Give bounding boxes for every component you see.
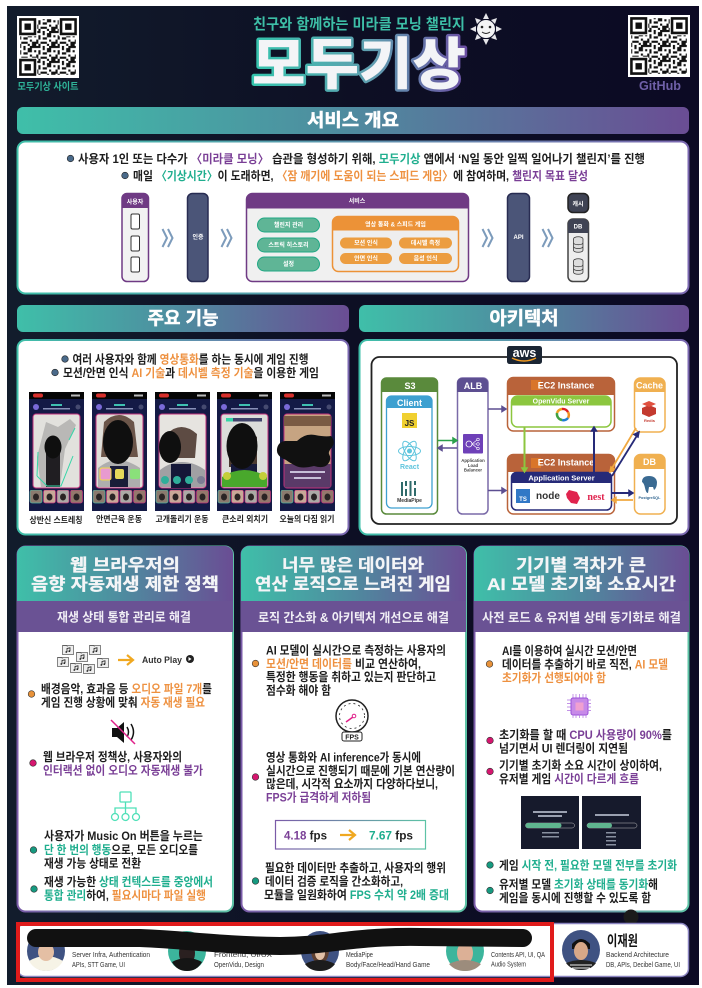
- cache box: Cache: [636, 380, 663, 390]
- member 4: [446, 931, 545, 971]
- icon: FPS gauge: FPS: [345, 734, 359, 742]
- text: browser policy: [30, 749, 203, 778]
- text: single action: 재생 가능 상태로 전환: [44, 856, 141, 870]
- icon: React: React: [400, 464, 420, 471]
- phone: head tilting exercise: [155, 392, 210, 511]
- text: model init: 초기화가 선행되어야 함: [502, 670, 606, 685]
- QR code: GitHub: [628, 15, 690, 93]
- AWS badge: aws: [513, 346, 536, 360]
- diagram: auth: 인증: [192, 233, 204, 241]
- card title: 웹 브라우저의: [70, 556, 180, 575]
- callout: fps improvement: 7.67 fps: [369, 828, 413, 842]
- QR label: site: 모두기상 사이트: [18, 80, 78, 93]
- cache box: [634, 378, 666, 432]
- icon: music files to auto play: Auto Play: [142, 655, 182, 665]
- box: video call and speed game: 영상 통화 & 스피드 게임: [365, 220, 426, 228]
- client box: [386, 396, 432, 508]
- text: sync state: 게임을 동시에 진행할 수 있도록 함: [499, 890, 651, 905]
- card title: AI 모델 초기화 소요시간: [487, 575, 676, 594]
- redaction dot: [624, 910, 638, 924]
- member 5: DB, APIs, Decibel Game, UI: [606, 960, 680, 969]
- text: audio files: [28, 681, 212, 710]
- text: logic simplified: 데이터 검증 로직을 간소화하고,: [265, 874, 403, 888]
- heading: service overview: [17, 107, 689, 134]
- icon: load balancer: [463, 434, 483, 454]
- text: audio files: 배경음악, 효과음 등 오디오 파일 7개를: [41, 681, 212, 696]
- card: too much data: [241, 546, 466, 912]
- member 5: 이재원: [607, 933, 638, 950]
- heading: key features: [17, 305, 349, 332]
- card title: [474, 546, 689, 601]
- DB box: [634, 454, 666, 514]
- caption: upper body stretching: 상반신 스트레칭: [30, 515, 82, 525]
- ALB box: [457, 378, 488, 514]
- text: logic simplified: [252, 860, 449, 902]
- caption: head tilting exercise: 고개돌리기 운동: [156, 514, 209, 524]
- overview sentence 1: 사용자 1인 또는 다수가 〈미라클 모닝〉 습관을 형성하기 위해, 모두기상 앱에서 ‘N일 동안 일찍 일어나기 챌린지’를 진행: [78, 151, 645, 166]
- card: autoplay policy: [17, 546, 233, 912]
- diagram: DB: [568, 219, 588, 282]
- application server: Application Server: [528, 474, 595, 482]
- card subtitle: 재생 상태 통합 관리로 해결: [57, 610, 191, 624]
- redaction scribble over names: [36, 937, 523, 946]
- member 5: [562, 930, 680, 970]
- icon: FPS gauge: [336, 700, 368, 742]
- text: fps drop: FPS가 급격하게 저하됨: [266, 790, 371, 804]
- OpenVidu server: OpenVidu Server: [533, 398, 590, 406]
- client box: Client: [397, 398, 422, 408]
- AWS boundary: [372, 357, 677, 524]
- member 4: Contents API, UI, QA: [491, 950, 545, 959]
- card title: 음향 자동재생 제한 정책: [31, 575, 219, 594]
- card: device gap: [474, 546, 689, 912]
- arrows: [438, 406, 639, 502]
- callout: fps improvement: [276, 820, 426, 849]
- pills: service functions: [258, 218, 320, 271]
- ALB box: Balancer: [464, 468, 482, 472]
- ALB box: Application: [461, 458, 485, 463]
- text: motion data: [252, 644, 446, 698]
- text: motion data: AI 모델이 실시간으로 측정하는 사용자의: [266, 644, 446, 658]
- caption: facial muscle exercise: 안면근육 운동: [96, 514, 142, 524]
- application server: [511, 472, 612, 510]
- panel: service overview: [18, 142, 688, 294]
- icon: smiling sun: [470, 13, 502, 45]
- card title: 기기별 격차가 큰: [516, 556, 646, 575]
- diagram: API: [508, 194, 530, 282]
- member 3: Body/Face/Head/Hand Game: [346, 960, 430, 969]
- text: model init: 데이터를 추출하기 바로 직전, AI 모델: [502, 656, 668, 672]
- card title: [17, 546, 233, 601]
- text: sync state: 유저별 모델 초기화 상태를 동기화해: [499, 876, 658, 892]
- subtitle: 친구와 함께하는 미라클 모닝 챌린지: [253, 16, 465, 33]
- S3 box: S3: [404, 381, 416, 391]
- icon: chip: [567, 694, 592, 718]
- icon: PostgreSQL: PostgreSQL: [639, 496, 661, 500]
- phone: facial muscle exercise: [92, 392, 147, 511]
- member 4: Audio System: [491, 960, 526, 968]
- diagram: API: API: [513, 235, 524, 241]
- box: video call and speed game: 음성 인식: [414, 254, 437, 262]
- member 2: OpenVidu, Design: [214, 960, 264, 969]
- card subtitle: [474, 601, 689, 632]
- card title: [241, 546, 466, 601]
- text: timing difference: [487, 758, 662, 786]
- title block: [252, 16, 466, 96]
- card subtitle: 로직 간소화 & 아키텍처 개선으로 해결: [258, 610, 449, 625]
- text: fps drop: 영상 통화와 AI inference가 동시에: [266, 750, 421, 764]
- callout: fps improvement: 4.18 fps: [284, 828, 327, 842]
- text: sync state: [487, 876, 658, 905]
- arrow: [542, 229, 552, 247]
- icon: WebRTC: [557, 409, 569, 420]
- S3 box: [381, 378, 438, 514]
- diagram: service box: 서비스: [349, 197, 366, 205]
- text: fps drop: 많은데, 시각적 요소까지 다양하다보니,: [266, 776, 438, 791]
- text: motion data: 특정한 행동을 취하고 있는지 판단하고: [266, 669, 436, 684]
- features sentence 1: 여러 사용자와 함께 영상통화를 하는 동시에 게임 진행: [72, 352, 308, 366]
- card title: 연산 로직으로 느려진 게임: [255, 575, 451, 594]
- diagram: auth: [188, 194, 208, 282]
- box: video call and speed game: 데시벨 측정: [411, 239, 440, 247]
- heading: architecture: 아키텍처: [490, 308, 558, 328]
- card title: 너무 많은 데이터와: [282, 556, 424, 575]
- arrow: [222, 229, 232, 247]
- diagram: DB: DB: [574, 224, 583, 230]
- EC2 instance: application: EC2 Instance: [538, 458, 594, 468]
- diagram: cache: 캐시: [572, 200, 584, 208]
- text: CPU usage: 넘기면서 UI 렌더링이 지연됨: [499, 740, 628, 756]
- text: state context: [31, 874, 213, 902]
- text: browser policy: 인터랙션 없이 오디오 자동재생 불가: [43, 762, 203, 778]
- icon: Nest: nest: [587, 492, 605, 503]
- diagram: user: [122, 193, 148, 282]
- diagram: cache: [568, 194, 588, 212]
- text: single action: [30, 828, 203, 870]
- text: motion data: 모션/안면 데이터를 비교 연산하여,: [266, 657, 421, 671]
- main title: 모두기상: [252, 33, 466, 96]
- heading: architecture: [359, 305, 689, 332]
- box: video call and speed game: 모션 인식: [354, 239, 378, 247]
- features sentence 2: 모션/안면 인식 AI 기술과 데시벨 측정 기술을 이용한 게임: [63, 365, 319, 380]
- icon: muted speaker: [111, 720, 135, 744]
- text: state context: 통합 관리하여, 필요시마다 파일 실행: [44, 888, 206, 902]
- text: browser policy: 웹 브라우저 정책상, 사용자와의: [43, 749, 182, 764]
- text: init before game: 게임 시작 전, 필요한 모델 전부를 초기화: [499, 858, 677, 872]
- card subtitle: [17, 601, 233, 632]
- text: timing difference: 유저별 게임 시간이 다르게 흐름: [499, 771, 639, 786]
- text: model init: [486, 644, 668, 685]
- overview sentence 2: 매일 〈기상시간〉이 도래하면, 〈잠 깨기에 도움이 되는 스피드 게임〉에 참여하며, 챌린지 목표 달성: [133, 168, 588, 183]
- card subtitle: [241, 601, 466, 632]
- DB box: DB: [643, 457, 656, 467]
- text: logic simplified: 필요한 데이터만 추출하고, 사용자의 행위: [265, 860, 446, 875]
- icon: music files to auto play: [58, 646, 194, 674]
- phone: reading today's resolution: [280, 392, 335, 511]
- member 3: MediaPipe: [346, 950, 373, 959]
- icon: JS: JS: [405, 419, 415, 428]
- diagram: service box: [246, 194, 469, 282]
- member 1: Server Infra, Authentication: [72, 950, 150, 959]
- pills: service functions: 챌린지 관리: [274, 221, 303, 229]
- pills: service functions: 스트릭 히스토리: [268, 241, 309, 249]
- ALB box: Load: [468, 463, 479, 468]
- icon: state tree: [112, 792, 140, 820]
- EC2 instance: OpenVidu: EC2 Instance: [538, 380, 594, 390]
- member 1: [27, 931, 150, 971]
- box: video call and speed game: [332, 216, 459, 272]
- screenshot: loading screen 1: [521, 796, 579, 849]
- text: state context: 재생 가능한 상태 컨텍스트를 중앙에서: [44, 874, 213, 889]
- icon: TypeScript: TS: [519, 497, 527, 503]
- member 2: [168, 931, 272, 971]
- member 1: APIs, STT Game, UI: [72, 960, 125, 969]
- card subtitle: 사전 로드 & 유저별 상태 동기화로 해결: [482, 610, 681, 625]
- panel: architecture: [360, 340, 688, 534]
- phone: upper body stretching: [29, 392, 84, 511]
- text: CPU usage: 초기화를 할 때 CPU 사용량이 90%를: [499, 727, 672, 742]
- red highlight box: [18, 924, 552, 980]
- icon: Redis: Redis: [644, 418, 656, 423]
- heading: key features: 주요 기능: [148, 308, 218, 328]
- arrow: [162, 229, 172, 247]
- box: video call and speed game: 안면 인식: [354, 254, 378, 262]
- panel: team: [18, 924, 688, 976]
- arrow: [482, 229, 492, 247]
- redaction blob over phone 5: [277, 435, 334, 468]
- QR label: GitHub: GitHub: [639, 79, 681, 93]
- text: CPU usage: [487, 727, 672, 756]
- heading: service overview: 서비스 개요: [307, 110, 399, 130]
- EC2 instance: application: [507, 454, 615, 514]
- member 2: Frontend, UI/UX: [214, 950, 272, 959]
- text: audio files: 게임 진행 상황에 맞춰 자동 재생 필요: [41, 694, 205, 710]
- pills: service functions: 설정: [283, 260, 294, 268]
- text: fps drop: 실시간으로 진행되기 때문에 기본 연산량이: [266, 763, 455, 778]
- QR code: site: [17, 16, 79, 93]
- AWS badge: [507, 346, 542, 364]
- text: single action: 사용자가 Music On 버튼을 누르는: [44, 828, 203, 843]
- text: model init: AI를 이용하여 실시간 모션/안면: [502, 644, 637, 658]
- EC2 instance: OpenVidu: [507, 377, 615, 431]
- text: fps drop: [252, 750, 455, 804]
- text: motion data: 점수화 해야 함: [266, 682, 331, 698]
- icon: Node: node: [536, 491, 560, 502]
- panel: key features: [18, 340, 348, 534]
- caption: shouting: 큰소리 외치기: [222, 514, 268, 524]
- caption: reading resolution: 오늘의 다짐 읽기: [280, 514, 334, 524]
- text: timing difference: 기기별 초기화 소요 시간이 상이하여,: [499, 758, 662, 772]
- ALB box: ALB: [464, 381, 483, 391]
- screenshot: loading screen 2: [582, 796, 641, 849]
- text: single action: 단 한 번의 행동으로, 모든 오디오를: [44, 842, 198, 857]
- member 5: Backend Architecture: [606, 950, 669, 959]
- text: logic simplified: 모듈을 일원화하여 FPS 수치 약 2배 증대: [264, 887, 449, 902]
- member 3: [301, 931, 430, 971]
- phone: shouting: [217, 392, 272, 511]
- icon: MediaPipe: MediaPipe: [397, 498, 422, 504]
- diagram: user: 사용자: [127, 198, 144, 206]
